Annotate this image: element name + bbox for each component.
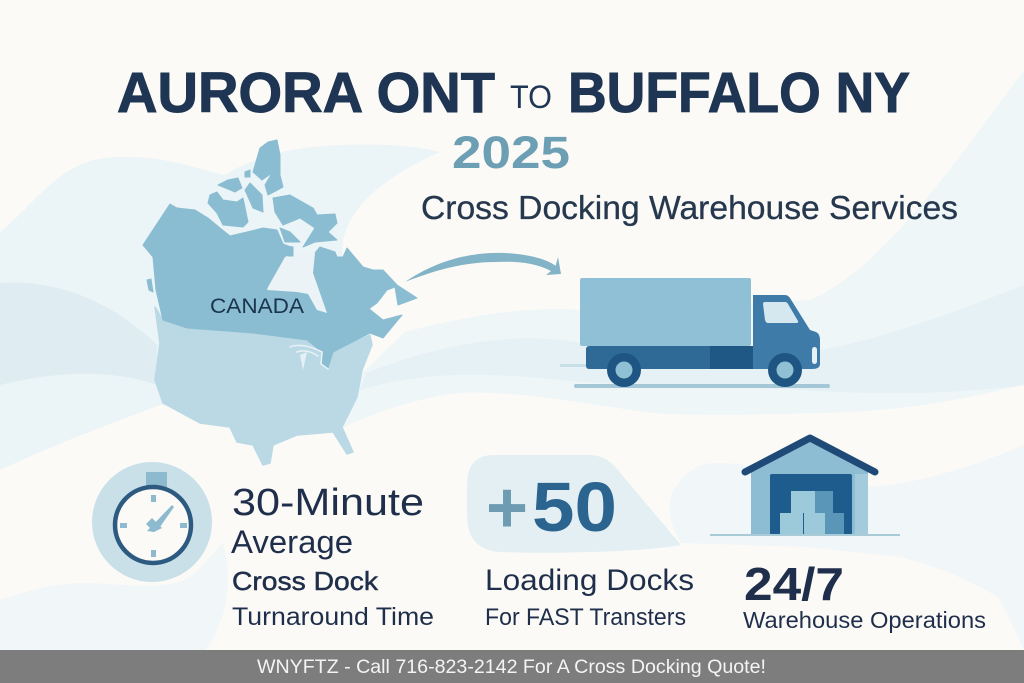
Canada mainland: [143, 204, 417, 368]
title: [117, 61, 910, 125]
text block: 30-minute turnaround: 30-Minute: [232, 482, 424, 524]
title: BUFFALO NY: [568, 61, 910, 125]
text block: 24/7 operations: [743, 558, 986, 633]
Arctic islands: [147, 140, 337, 292]
panel: loading docks number: 50: [532, 468, 617, 546]
map: North America: [143, 140, 417, 465]
footer bar: WNYFTZ - Call 716-823-2142 For A Cross Docking Quote!: [257, 657, 766, 678]
title: AURORA ONT: [117, 61, 495, 125]
text block: 30-minute turnaround: Average: [231, 524, 353, 560]
text block: 30-minute turnaround: Turnaround Time: [232, 603, 434, 631]
Great Lakes: [290, 345, 328, 369]
subtitle: Cross Docking Warehouse Services: [421, 189, 958, 226]
title: TO: [510, 79, 552, 115]
year: 2025: [452, 127, 570, 178]
USA: [155, 307, 372, 465]
text block: 24/7 operations: Warehouse Operations: [743, 607, 986, 633]
panel: loading docks number: [467, 455, 681, 553]
panel: loading docks number: +: [486, 468, 528, 548]
text block: loading docks: Loading Docks: [485, 564, 694, 597]
text block: loading docks: [485, 564, 694, 631]
Hudson Bay: [267, 250, 327, 313]
text block: 30-minute turnaround: Cross Dock: [232, 566, 379, 596]
text block: 24/7 operations: 24/7: [744, 558, 844, 610]
text block: 30-minute turnaround: [231, 482, 434, 631]
text block: loading docks: For FAST Transters: [485, 604, 686, 631]
footer bar: [0, 650, 1024, 683]
arrow: route to truck: [405, 253, 561, 282]
icon: truck: [560, 278, 830, 388]
icon: warehouse: [710, 438, 900, 536]
icon: stopwatch: [92, 462, 212, 582]
map label: CANADA: [210, 295, 304, 318]
